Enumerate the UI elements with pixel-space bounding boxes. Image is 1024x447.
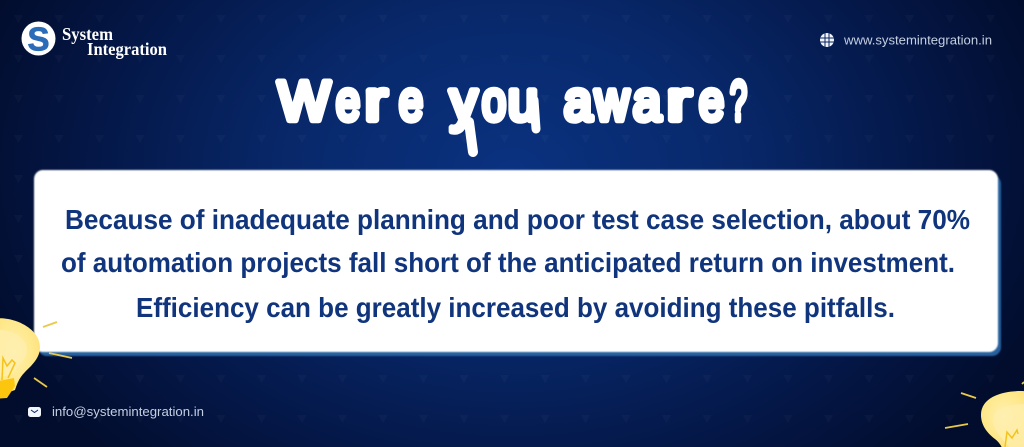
card text: of automation projects fall short of the anticipated return on investment. [61, 247, 955, 278]
title: e [336, 69, 360, 132]
icon: light bulb right [945, 382, 1024, 447]
title: ? [730, 69, 747, 132]
title: a [564, 69, 593, 132]
website text: www.systemintegration.in [843, 34, 992, 48]
panel: fact card [34, 170, 1001, 356]
icon: S logo badge [22, 20, 56, 58]
logo wordmark [62, 24, 167, 59]
title [278, 69, 747, 152]
logo wordmark: System [62, 24, 113, 44]
title: o [482, 69, 506, 132]
title: y [450, 69, 477, 132]
title: W [278, 69, 330, 132]
icon: envelope [28, 407, 41, 417]
card text [61, 204, 970, 323]
card text: Efficiency can be greatly increased by avoiding these pitfalls. [136, 292, 895, 323]
card shadow edge [38, 175, 1001, 356]
card text: Because of inadequate planning and poor test case selection, about 70% [65, 204, 970, 235]
card body [34, 170, 998, 352]
title: w [594, 69, 629, 132]
email text: info@systemintegration.in [52, 405, 204, 419]
title: r [667, 69, 691, 132]
title: a [633, 69, 662, 132]
icon: globe [820, 33, 834, 47]
email contact [28, 405, 204, 419]
icon: S logo badge: S [27, 20, 50, 58]
title: e [399, 69, 423, 132]
title: e [699, 69, 724, 132]
title: r [365, 69, 387, 132]
logo: System Integration [22, 20, 167, 59]
logo wordmark: Integration [87, 39, 167, 59]
icon: light bulb left [0, 318, 72, 399]
title: u [508, 69, 538, 132]
website link [820, 33, 992, 48]
